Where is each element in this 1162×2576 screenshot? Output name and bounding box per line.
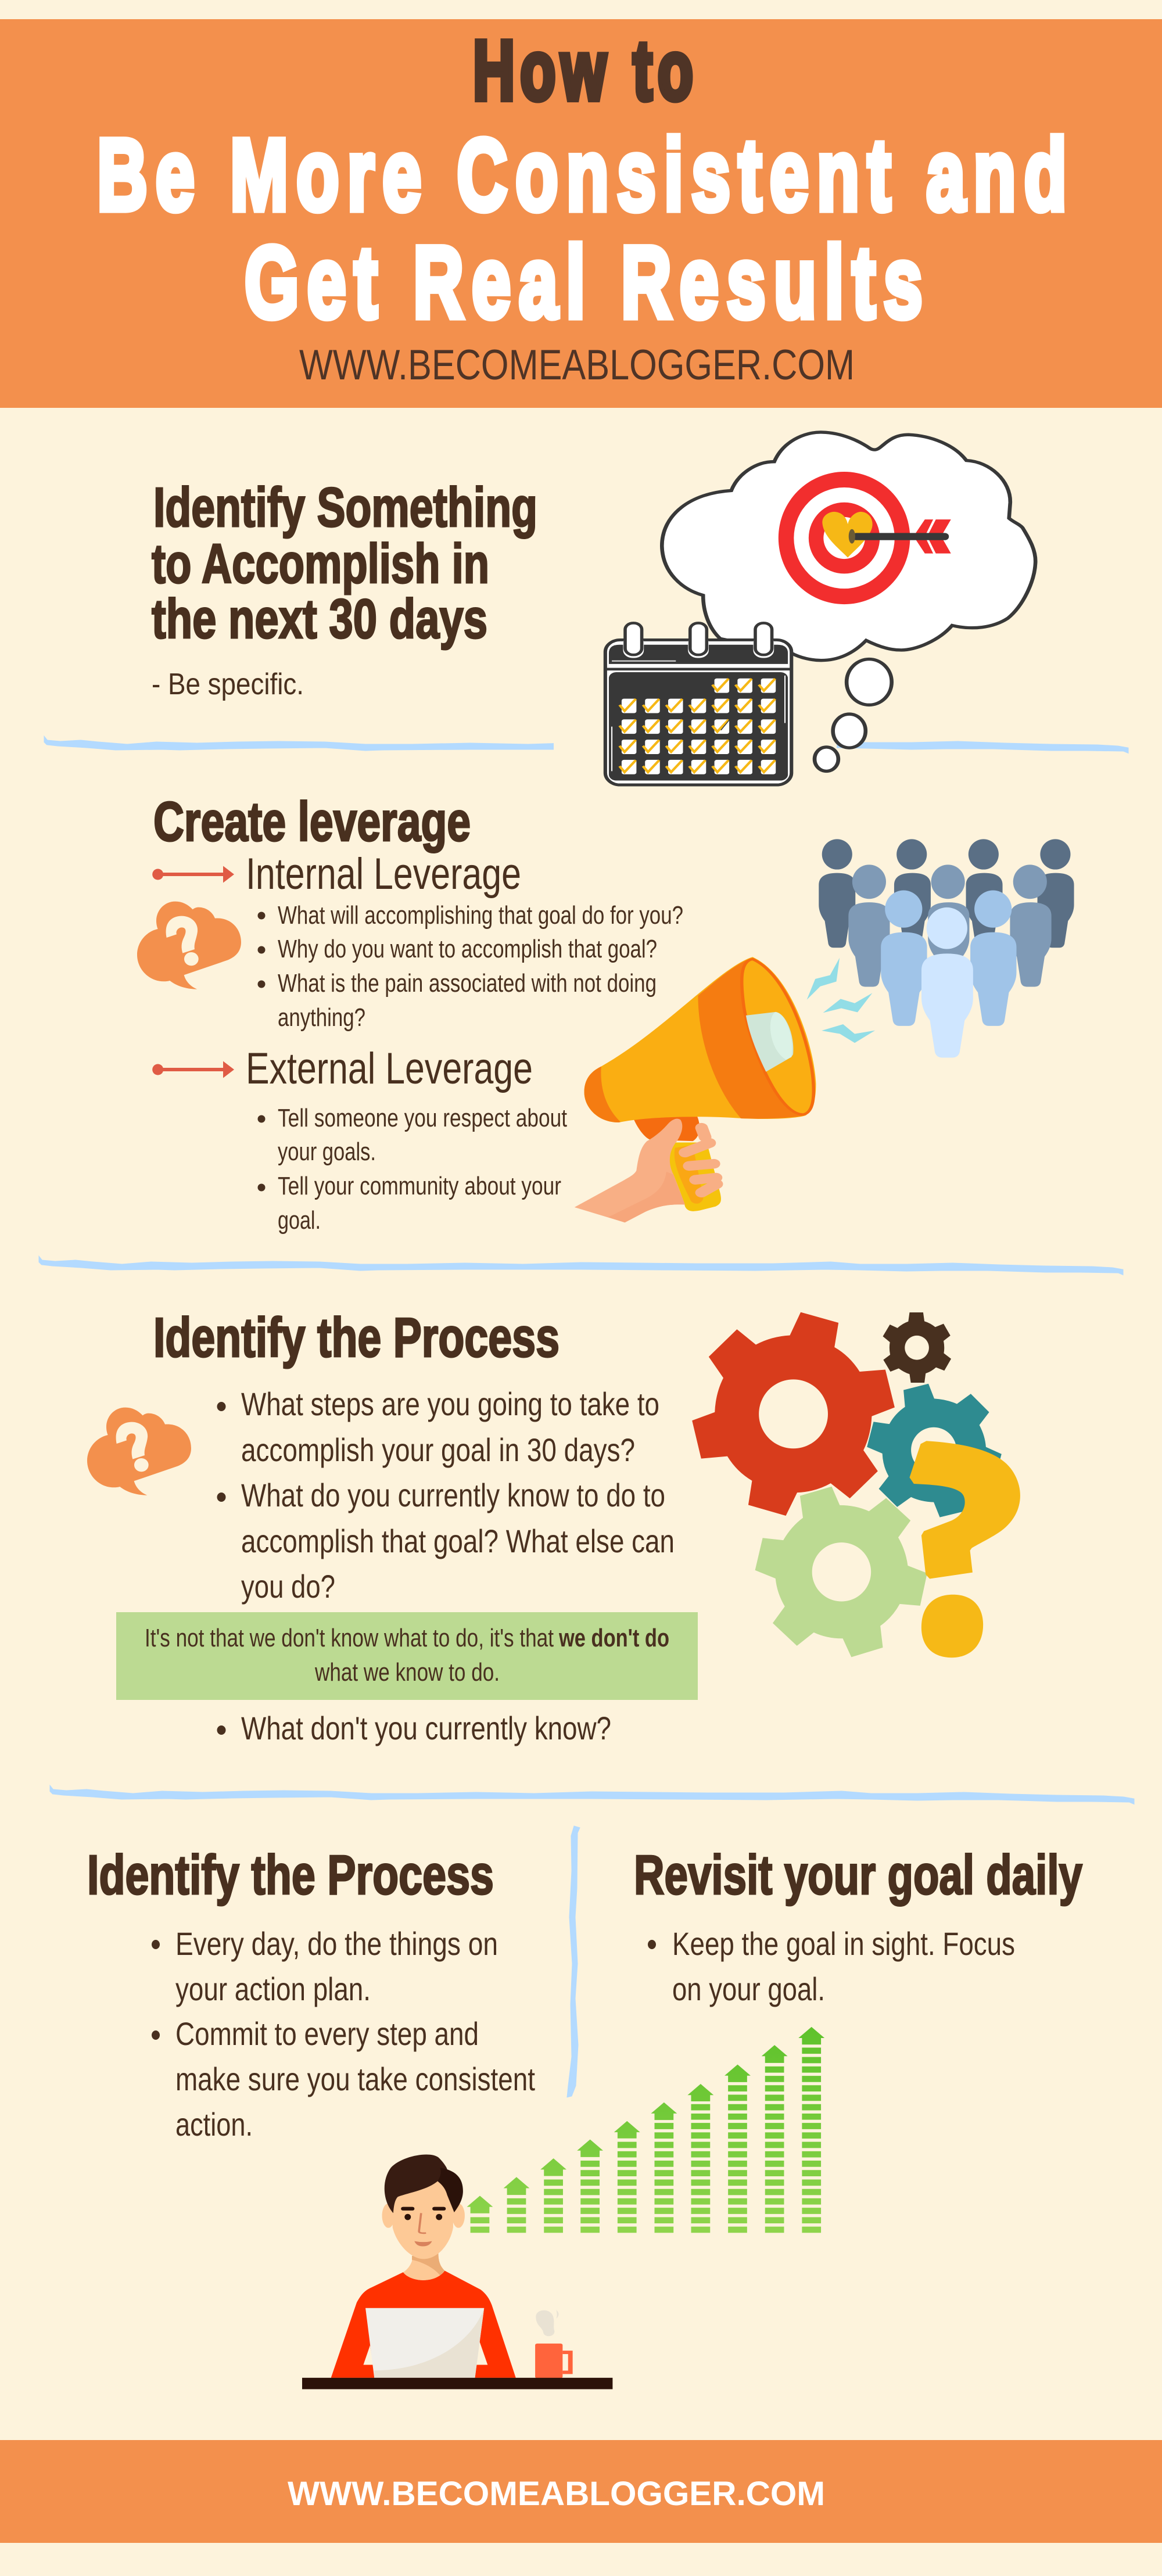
mug with steam	[535, 2310, 571, 2378]
bullets: Commit to every step and	[175, 2015, 479, 2052]
bullets	[152, 1925, 535, 2143]
icon: calendar	[605, 623, 792, 785]
bullets: accomplish your goal in 30 days?	[241, 1431, 635, 1468]
bullets: action.	[175, 2106, 253, 2143]
bullet: what don't you know: What don't you currently know?	[241, 1710, 611, 1746]
icon: question cloud	[87, 1408, 191, 1495]
hand	[575, 1119, 717, 1222]
illustration: rising green arrows chart	[467, 2027, 824, 2233]
internal leverage bullets: What will accomplishing that goal do for you?	[278, 901, 683, 930]
heading: Identify the Process	[153, 1307, 560, 1369]
external leverage bullets: Tell someone you respect about	[278, 1104, 567, 1132]
subheading: external leverage: External Leverage	[246, 1044, 533, 1093]
internal leverage bullets	[258, 901, 683, 1032]
internal leverage bullets: anything?	[278, 1003, 365, 1032]
section 2: create leverage	[137, 791, 683, 1235]
external leverage bullets: Tell your community about your	[278, 1172, 561, 1200]
bullet: on your goal.	[672, 1971, 825, 2007]
bullets: your action plan.	[175, 1971, 371, 2007]
thought bubbles	[815, 659, 892, 771]
internal leverage bullets: Why do you want to accomplish that goal?	[278, 935, 657, 963]
heading	[152, 476, 537, 650]
callout: green quote box: we don't do	[558, 1624, 669, 1652]
heading: Identify Something	[153, 476, 537, 539]
note: be specific: - Be specific.	[152, 668, 304, 701]
arrow: internal leverage	[152, 866, 234, 883]
shirt	[331, 2270, 516, 2378]
callout: green quote box: what we know to do.	[314, 1658, 500, 1687]
illustration: person at laptop with mug	[302, 2155, 612, 2389]
neck	[403, 2254, 444, 2280]
title: How to: How to	[473, 24, 693, 117]
handle	[669, 1142, 721, 1211]
footer url: WWW.BECOMEABLOGGER.COM	[288, 2475, 825, 2513]
head	[382, 2155, 465, 2259]
icon: question cloud	[137, 902, 241, 989]
bullets: make sure you take consistent	[175, 2061, 535, 2097]
divider 1	[45, 736, 1128, 754]
sound waves	[807, 958, 875, 1043]
section 3: identify the process	[87, 1307, 698, 1746]
heading: Create leverage	[153, 791, 471, 853]
desk	[302, 2378, 612, 2389]
section 4 left: identify the process	[87, 1844, 535, 2143]
illustration: thought cloud with target and calendar	[605, 432, 1035, 785]
bullets: accomplish that goal? What else can	[241, 1523, 675, 1559]
icon: target with heart and arrow	[779, 472, 951, 604]
section 4 right: revisit your goal daily	[634, 1844, 1082, 2007]
heading: the next 30 days	[152, 588, 487, 650]
red gear	[692, 1312, 895, 1516]
green gear	[755, 1487, 927, 1657]
title: Be More Consistent and: Be More Consistent and	[97, 118, 1067, 231]
bullet	[648, 1925, 1015, 2007]
bullets: What do you currently know to do to	[241, 1477, 665, 1513]
illustration: gears and question mark	[692, 1312, 1020, 1657]
heading: to Accomplish in	[152, 533, 489, 595]
section 1: identify something to accomplish	[152, 476, 537, 701]
callout: green quote box	[116, 1612, 698, 1700]
laptop	[365, 2308, 484, 2378]
illustration: megaphone with hand	[575, 957, 875, 1222]
title: Get Real Results: Get Real Results	[245, 225, 923, 339]
external leverage bullets	[258, 1104, 567, 1235]
footer banner	[0, 2440, 1162, 2543]
question mark	[909, 1441, 1020, 1657]
divider 3	[51, 1787, 1134, 1803]
header banner	[0, 19, 1162, 408]
bullet: Keep the goal in sight. Focus	[672, 1925, 1015, 1962]
callout: green quote box: It's not that we don't know what to do, it's that	[145, 1624, 554, 1652]
bullets: Every day, do the things on	[175, 1925, 498, 1962]
small dark gear	[883, 1312, 951, 1383]
divider 2	[40, 1258, 1122, 1274]
bullets: you do?	[241, 1568, 335, 1605]
bullets	[217, 1386, 675, 1605]
internal leverage bullets: What is the pain associated with not doing	[278, 969, 657, 998]
header url: WWW.BECOMEABLOGGER.COM	[299, 342, 855, 389]
heading: Identify the Process	[87, 1844, 494, 1906]
external leverage bullets: your goals.	[278, 1138, 376, 1166]
illustration: crowd of people	[819, 839, 1074, 1057]
external leverage bullets: goal.	[278, 1206, 321, 1235]
vertical divider	[567, 1826, 580, 2097]
teal gear	[867, 1384, 1002, 1517]
subheading: internal leverage: Internal Leverage	[246, 849, 521, 899]
arrow: external leverage	[152, 1061, 234, 1078]
bullets: What steps are you going to take to	[241, 1386, 659, 1422]
thought cloud	[662, 432, 1035, 661]
